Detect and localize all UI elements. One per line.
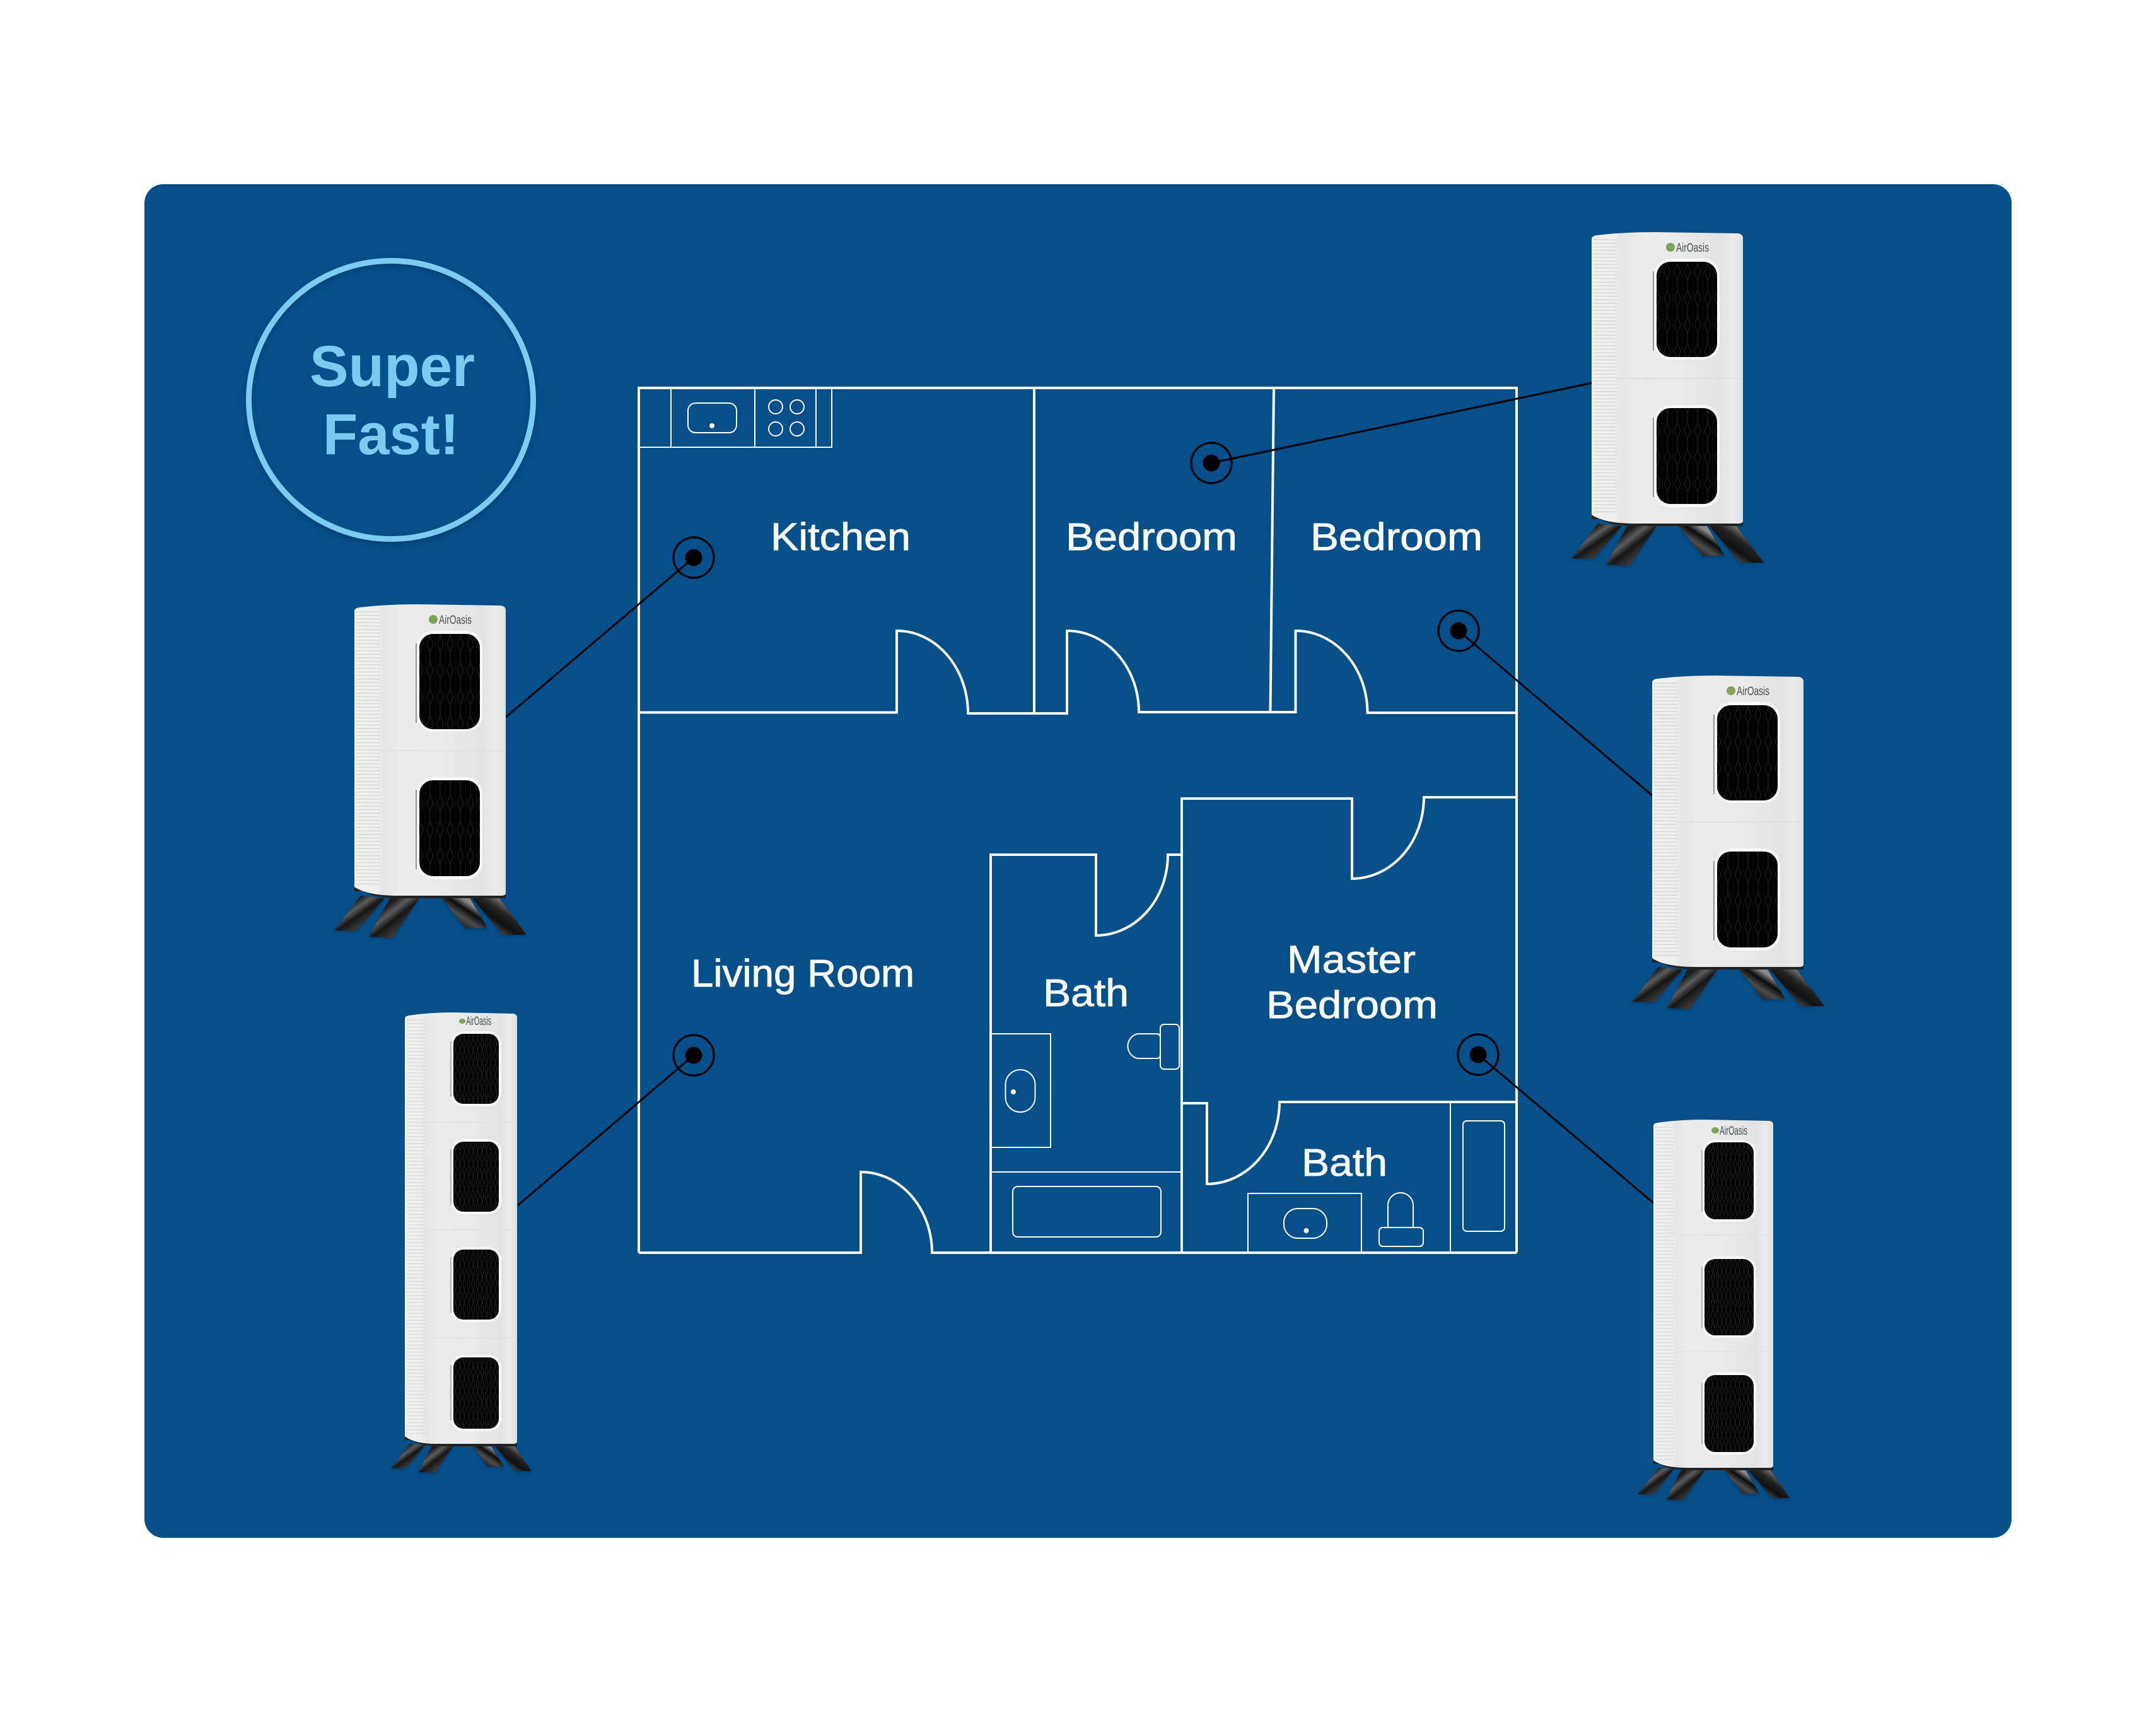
badge text: Super xyxy=(310,334,475,399)
filter window 2 xyxy=(1702,1256,1756,1338)
background panel xyxy=(144,184,2012,1538)
label: Bedroom: Bedroom xyxy=(1066,515,1237,558)
filter window 4 xyxy=(451,1355,501,1431)
brand logo xyxy=(429,614,472,627)
filter window bottom xyxy=(416,777,482,879)
brand logo xyxy=(1666,242,1709,255)
legs xyxy=(1632,967,1824,1009)
purifier: master bedroom three-unit xyxy=(1638,1120,1790,1501)
master bath sink drain xyxy=(1304,1228,1309,1233)
bath fixtures xyxy=(992,1024,1180,1237)
brand logo: AirOasis xyxy=(1737,685,1769,698)
master bath fixtures xyxy=(1248,1103,1505,1251)
label: Bath: Bath xyxy=(1043,971,1129,1014)
bath tub xyxy=(1013,1186,1161,1237)
room labels xyxy=(691,515,1483,1184)
bedroom walls and doors xyxy=(967,631,1515,713)
label: Master Bedroom: Master xyxy=(1287,938,1416,981)
label: Bedroom: Bedroom xyxy=(1310,515,1483,558)
counter xyxy=(640,389,832,447)
kitchen fixtures xyxy=(640,389,832,447)
brand logo xyxy=(1711,1125,1747,1138)
brand logo: AirOasis xyxy=(439,614,472,627)
body xyxy=(354,604,506,896)
floor plan xyxy=(639,388,1517,1253)
master toilet bowl xyxy=(1388,1193,1413,1227)
wall between bedrooms xyxy=(1270,388,1274,712)
badge text: Fast! xyxy=(323,402,459,467)
brand logo: AirOasis xyxy=(466,1015,491,1028)
marker: bedroom one xyxy=(1191,383,1592,483)
legs xyxy=(1638,1468,1790,1501)
filter window bottom xyxy=(1653,405,1720,507)
brand logo xyxy=(459,1015,491,1028)
marker: master bedroom xyxy=(1458,1034,1654,1204)
marker: living room xyxy=(518,1035,714,1205)
body xyxy=(1652,676,1803,967)
body xyxy=(1653,1120,1773,1468)
filter window bottom xyxy=(1714,848,1780,951)
bath walls and door xyxy=(991,855,1182,1253)
stove burners xyxy=(769,400,804,436)
filter window 1 xyxy=(451,1031,501,1106)
toilet tank xyxy=(1160,1024,1179,1069)
legs xyxy=(334,896,527,938)
badge circle xyxy=(248,261,533,539)
master bath wall and door xyxy=(1182,1102,1517,1184)
brand logo: AirOasis xyxy=(1676,242,1709,255)
kitchen sink xyxy=(688,403,737,433)
master toilet tank xyxy=(1379,1227,1423,1246)
living room bottom wall and door xyxy=(639,1172,1517,1253)
bath sink drain xyxy=(1011,1089,1016,1094)
bath tub divider xyxy=(992,1171,1180,1173)
body xyxy=(405,1012,517,1444)
legs xyxy=(1571,524,1764,566)
marker: bedroom two xyxy=(1438,611,1653,796)
label: Master Bedroom: Bedroom xyxy=(1266,983,1438,1026)
legs xyxy=(391,1444,532,1473)
filter window 1 xyxy=(1702,1140,1756,1222)
purifier: second bedroom two-unit xyxy=(1632,676,1824,1009)
filter window 3 xyxy=(1702,1373,1756,1455)
master bath tub xyxy=(1463,1121,1505,1231)
filter window top xyxy=(1714,702,1780,803)
wall between kitchen and bedroom xyxy=(1033,388,1035,713)
filter window top xyxy=(1653,259,1720,360)
purifier: bedroom two-unit xyxy=(1571,232,1764,566)
master bath sink xyxy=(1284,1209,1327,1238)
outer walls xyxy=(639,388,1517,1253)
master bath vanity xyxy=(1248,1193,1361,1251)
label: Bath: Bath xyxy=(1302,1141,1387,1184)
master bath tub divider xyxy=(1450,1103,1451,1251)
master bedroom walls and door xyxy=(1182,797,1517,1253)
bath vanity xyxy=(992,1034,1051,1147)
toilet bowl xyxy=(1128,1034,1160,1058)
bath sink xyxy=(1005,1070,1035,1112)
purifier: kitchen two-unit xyxy=(334,604,527,938)
filter window top xyxy=(416,631,482,732)
brand logo xyxy=(1727,685,1769,698)
kitchen wall and door xyxy=(639,631,968,713)
sink drain xyxy=(709,423,714,428)
label: Kitchen: Kitchen xyxy=(771,515,911,558)
filter window 3 xyxy=(451,1247,501,1322)
body xyxy=(1592,232,1743,524)
filter window 2 xyxy=(451,1139,501,1214)
purifier: living room four-unit xyxy=(391,1012,532,1473)
badge: Super Fast xyxy=(248,261,533,539)
label: Living Room: Living Room xyxy=(691,952,914,995)
marker: kitchen xyxy=(506,537,714,717)
brand logo: AirOasis xyxy=(1720,1125,1747,1138)
